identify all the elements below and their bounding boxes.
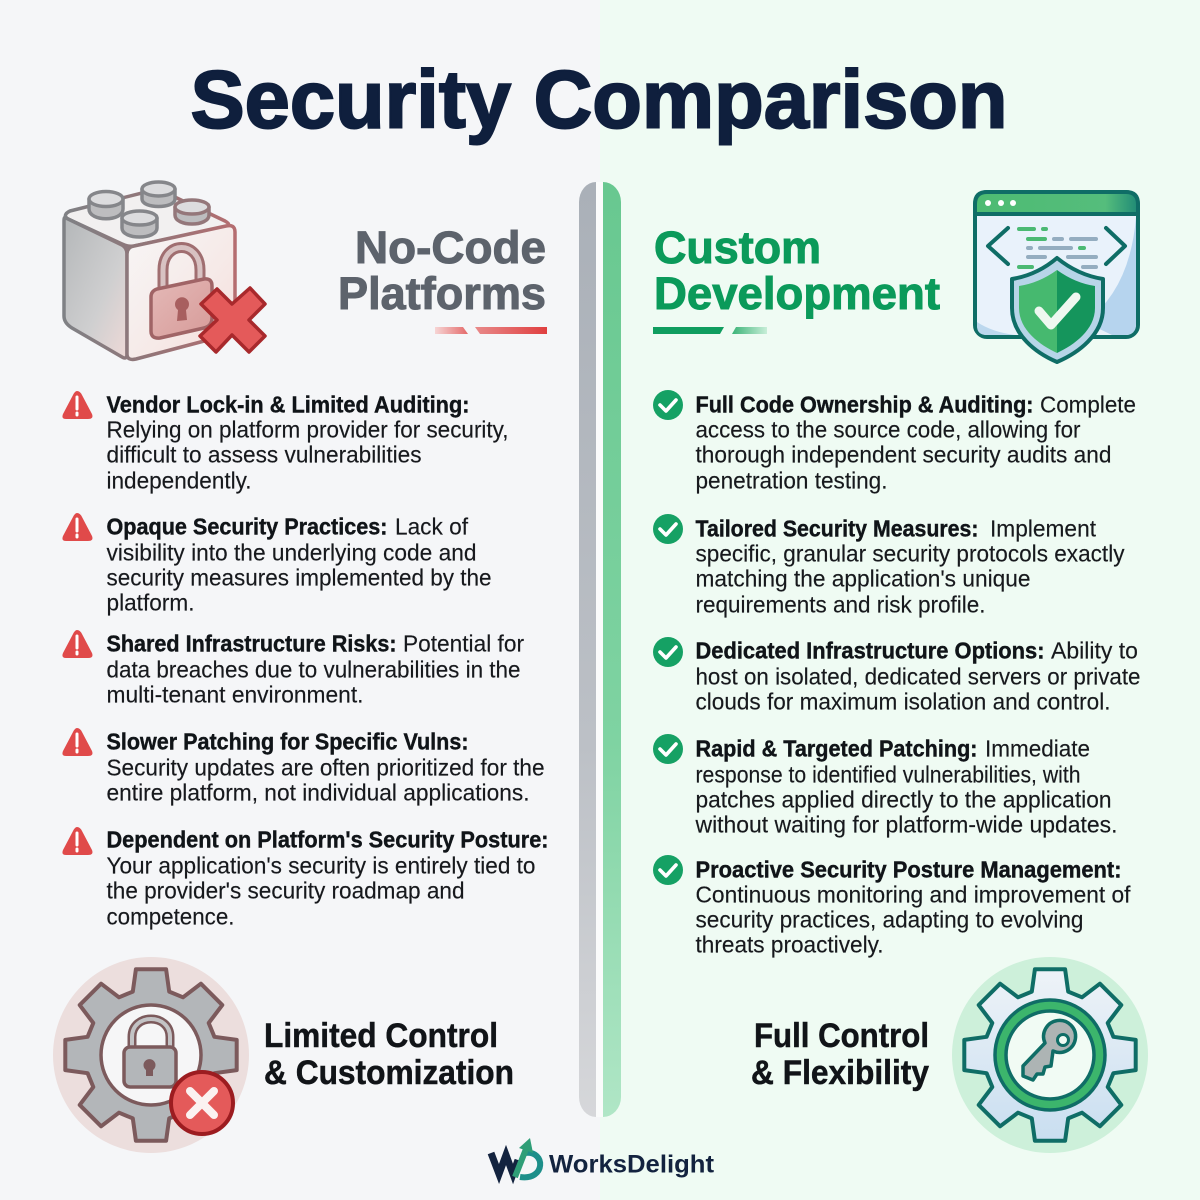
logo: WorksDelight: WorksDelight [549,1150,715,1178]
item: Proactive Security Posture: security practices, adapting to evolving [696,906,1084,932]
padlock [163,248,200,287]
heading: Custom Development [653,222,940,334]
heading: Custom Development: Development [654,268,940,319]
item: Vendor Lock-in [62,391,509,494]
item: Vendor Lock-in: difficult to assess vulnerabilities [106,442,422,468]
item: Dependent on Platform: competence. [106,904,234,930]
central divider [579,182,621,1117]
item: Dedicated Infrastructure Options: clouds for maximum isolation and control. [696,688,1110,714]
item: Opaque Security Practices: Lack of [395,514,469,540]
shield [1012,258,1103,362]
brick studs [89,182,209,237]
item: Tailored Security Measures: matching the application's unique [696,566,1030,592]
item: Opaque Security Practices: Opaque Security Practices: [106,514,388,540]
callout: Full Control & Flexibility: & Flexibility [751,1054,929,1092]
item: Slower Patching [62,728,545,806]
item: Shared Infrastructure Risks [62,630,524,708]
item: Tailored Security Measures [653,514,1125,618]
logo: WorksDelight [491,1138,715,1178]
item: Dependent on Platform [62,826,549,930]
item: Shared Infrastructure Risks: multi-tenant environment. [106,682,364,708]
heading: No-Code Platforms [338,222,547,334]
panel: Custom Development benefits [653,390,1140,958]
item: Rapid & Targeted Patching: without waiting for platform-wide updates. [695,812,1118,838]
item: Dedicated Infrastructure Options: Dedicated Infrastructure Options: [696,638,1044,664]
icon: code window with shield [975,192,1138,362]
item: Opaque Security Practices [62,513,492,616]
icon: lego brick with broken lock [64,182,265,359]
title: Security Comparison [190,54,1008,146]
item: Rapid & Targeted Patching: Rapid & Targeted Patching: [696,736,978,762]
callout: Full Control & Flexibility: Full Control [754,1017,929,1055]
item: Dependent on Platform: the provider's security roadmap and [106,878,464,904]
item: Dedicated Infrastructure Options [653,637,1140,714]
item: Proactive Security Posture [653,855,1131,958]
item: Shared Infrastructure Risks: data breaches due to vulnerabilities in the [106,656,520,682]
item: Shared Infrastructure Risks: Shared Infrastructure Risks: [106,630,396,656]
item: Slower Patching: Slower Patching for Specific Vulns: [106,728,468,754]
background: right panel [600,0,1200,1200]
icon: gear with key [952,957,1148,1153]
item: Tailored Security Measures: Tailored Security Measures: [696,516,978,542]
item: Rapid & Targeted Patching: patches applied directly to the application [696,786,1112,812]
item: Full Code Ownership: access to the source code, allowing for [696,416,1081,442]
callout: Limited Control & Customization: Limited Control [264,1017,498,1055]
item: Tailored Security Measures: Implement [990,516,1097,542]
item: Vendor Lock-in: independently. [106,468,252,494]
panel: No-Code risks [62,391,549,930]
callout: Limited Control & Customization: & Customization [264,1054,514,1092]
item: Tailored Security Measures: requirements and risk profile. [696,592,986,618]
item: Shared Infrastructure Risks: Potential for [403,630,524,656]
heading: No-Code Platforms: No-Code [355,222,546,273]
item: Full Code Ownership: Complete [1040,392,1136,418]
item: Full Code Ownership [653,390,1136,494]
item: Full Code Ownership: thorough independent security audits and [696,442,1112,468]
red cross [200,288,265,352]
heading: No-Code Platforms: Platforms [338,268,546,319]
item: Vendor Lock-in: Relying on platform provider for security, [106,416,508,442]
item: Full Code Ownership: Full Code Ownership & Auditing: [696,392,1034,418]
item: Dedicated Infrastructure Options: Ability to [1051,638,1138,664]
item: Rapid & Targeted Patching: response to identified vulnerabilities, with [696,762,1080,788]
item: Full Code Ownership: penetration testing. [696,468,888,494]
item: Vendor Lock-in: Vendor Lock-in & Limited Auditing: [106,392,470,418]
item: Opaque Security Practices: security measures implemented by the [106,564,492,590]
item: Dependent on Platform: Dependent on Platform's Security Posture: [106,826,548,852]
item: Opaque Security Practices: platform. [106,590,194,616]
item: Slower Patching: entire platform, not individual applications. [106,780,530,806]
icon: gear with lock and red x [53,957,249,1153]
callout: Full Control & Flexibility [751,1017,929,1092]
background: left panel [0,0,600,1200]
item: Rapid & Targeted Patching: Immediate [985,736,1090,762]
item: Opaque Security Practices: visibility into the underlying code and [106,540,476,566]
item: Rapid & Targeted Patching [653,734,1118,838]
callout: Limited Control & Customization [264,1017,514,1092]
item: Dedicated Infrastructure Options: host on isolated, dedicated servers or private [696,664,1140,690]
item: Proactive Security Posture: Proactive Security Posture Management: [696,856,1122,882]
item: Proactive Security Posture: threats proactively. [696,932,884,958]
item: Tailored Security Measures: specific, granular security protocols exactly [696,540,1125,566]
item: Dependent on Platform: Your application's security is entirely tied to [106,852,536,878]
item: Slower Patching: Security updates are often prioritized for the [106,754,544,780]
item: Proactive Security Posture: Continuous monitoring and improvement of [696,882,1131,908]
heading: Custom Development: Custom [654,222,821,273]
